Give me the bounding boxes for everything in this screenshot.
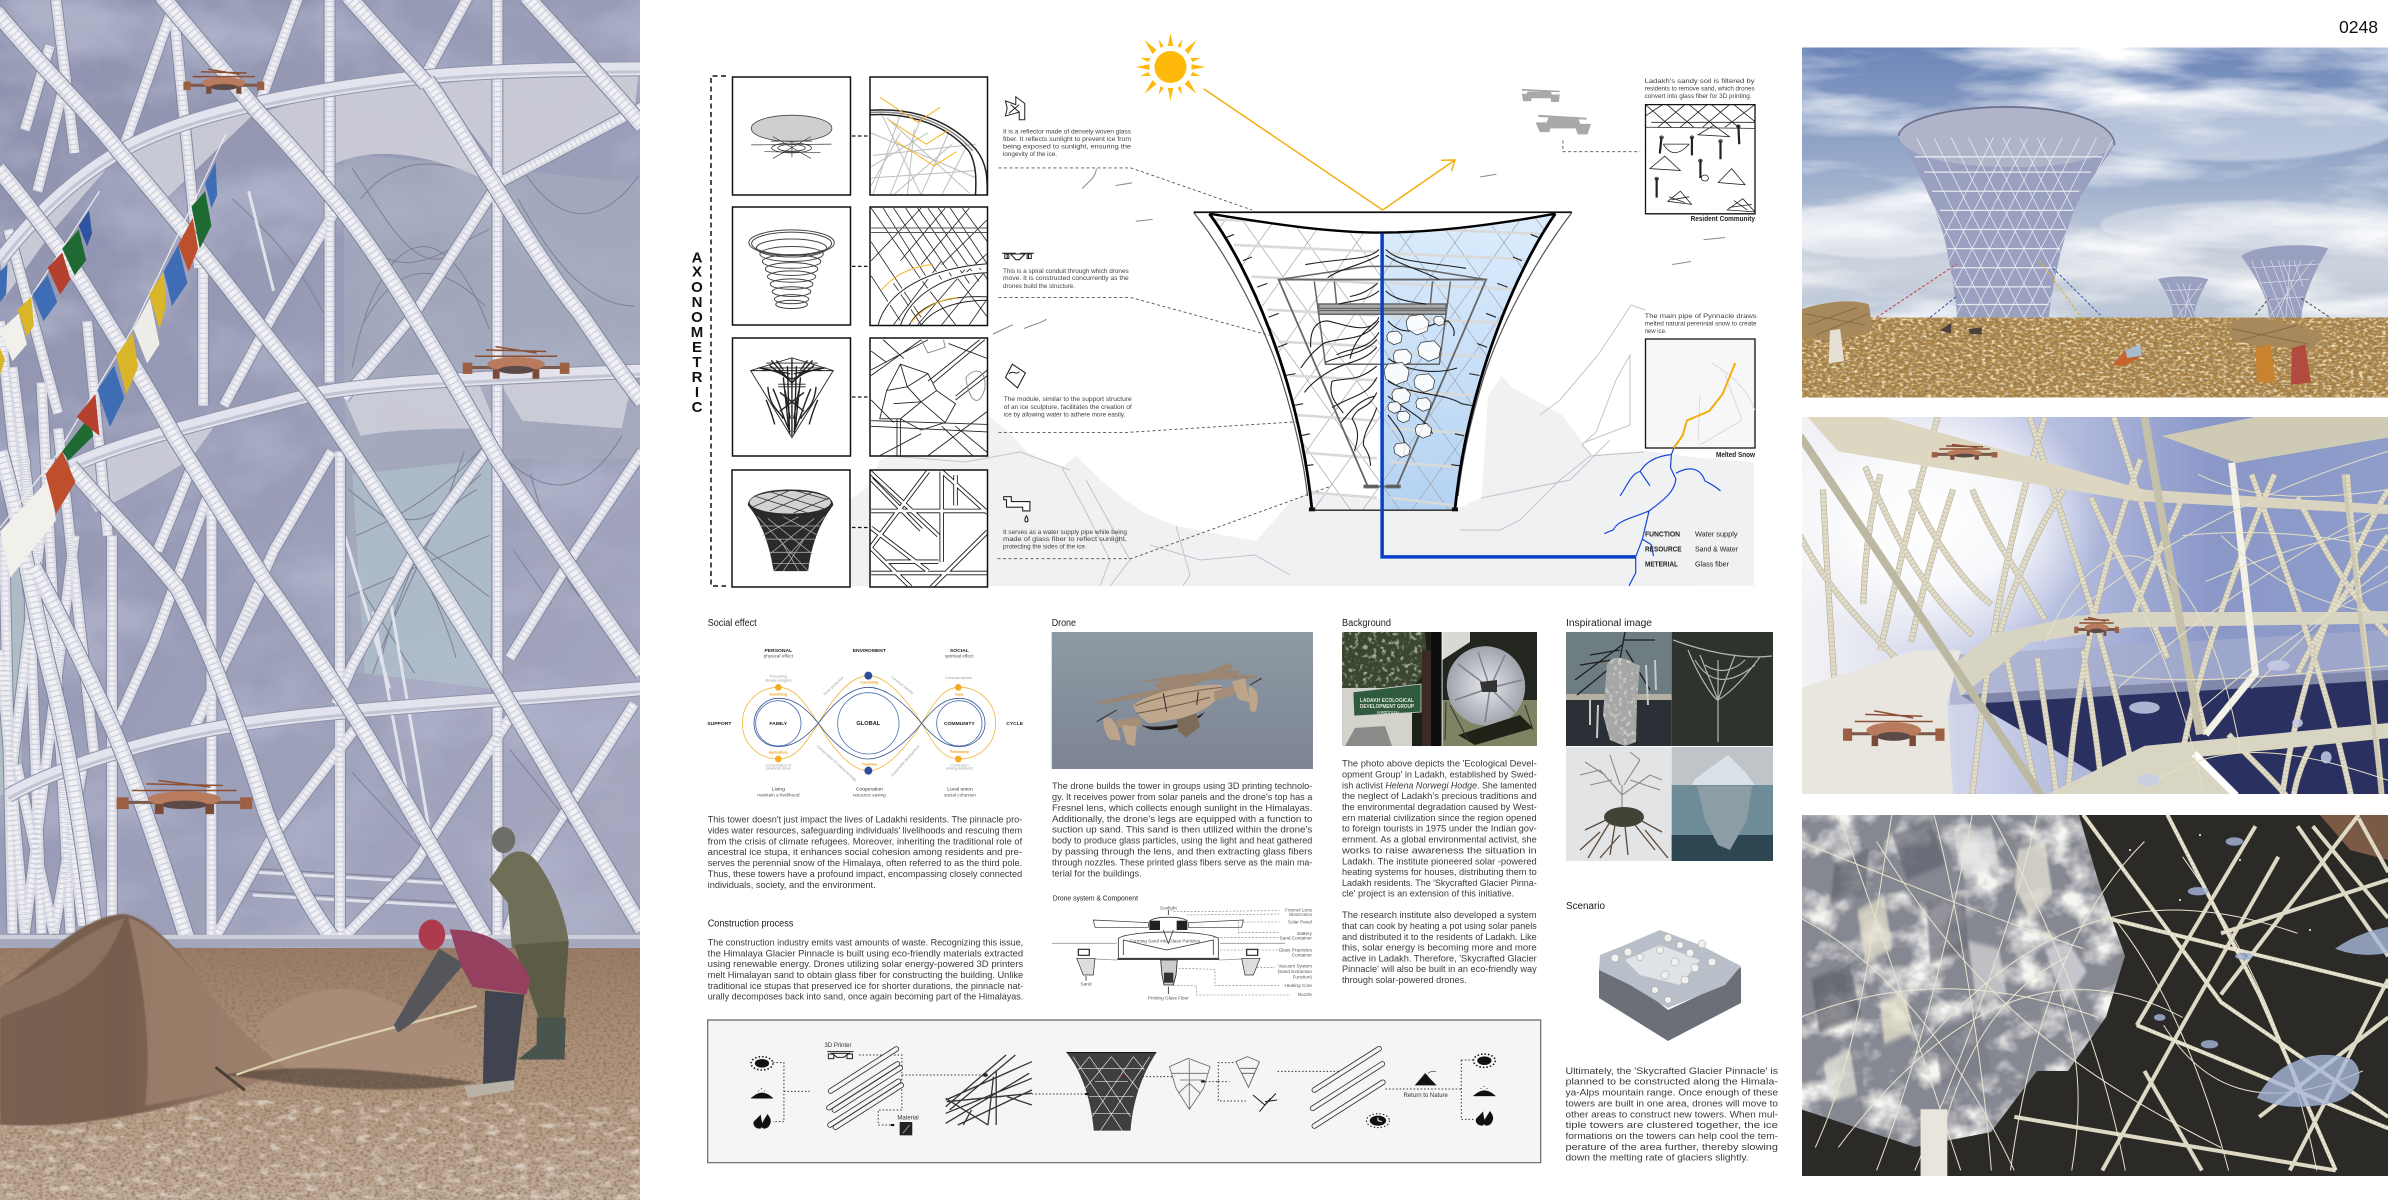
mountain backdrop of the main section (850, 305, 1754, 586)
text: drone paragraph: terial for the buildings. (1052, 868, 1142, 878)
text: reflector description: It is a reflector made of densely woven glass (1003, 128, 1132, 135)
text: spiral conduit description (1003, 268, 1129, 290)
photo: tree with roots (1566, 747, 1672, 861)
text: social effect paragraph: Thus, these towers have a profound impact, encompassing closely connected (708, 869, 1022, 879)
text: construction paragraph: traditional ice stupas that preserved ice for shorter durations, the pinnacle nat- (708, 981, 1023, 991)
text: social effect paragraph: from the crisis of climate refugees. Moreover, inheriting the traditional role of (708, 836, 1023, 846)
text: background paragraph 2: through solar-powered drones. (1342, 975, 1467, 985)
diagram labels: Connection (950, 764, 969, 768)
module parts (1236, 1057, 1277, 1112)
panel: left render, tower lattice with workers (0, 0, 642, 1200)
table: function resource material: Sand & Water (1695, 544, 1739, 554)
diagram labels: physical effect (764, 654, 794, 659)
axonometric bracket and vertical label (691, 76, 726, 586)
text: background paragraph 1: heating systems for houses, distributing them to (1342, 867, 1537, 877)
white floor and slab (1800, 417, 2388, 796)
diagram labels: Fellowship (950, 750, 970, 754)
text: scenario paragraph: perature of the area further, thereby slowing (1566, 1142, 1778, 1152)
labels in cycle diagram: 3D Printer (824, 1043, 852, 1049)
caption: melted snow: Melted Snow (1716, 450, 1755, 459)
central water pipe (1382, 234, 1636, 557)
diagram labels: Living (772, 787, 785, 793)
text: reflector description: longevity of the ice. (1003, 151, 1057, 158)
crystal facets (1811, 819, 2087, 1102)
text: background paragraph 1: Ladakh. The institute pioneered solar -powered (1342, 856, 1537, 866)
text: water pipe description: protecting the sides of the ice. (1003, 544, 1087, 550)
text: construction paragraph: the Himalaya Glacier Pinnacle is built using eco-friendly materials extracted (708, 948, 1023, 958)
text: spiral conduit description: drones build the structure. (1003, 283, 1075, 290)
river branches (1604, 449, 1720, 586)
text: drone paragraph: Fresnel lens, which collects enough sunlight in the Himalayas. (1052, 803, 1312, 813)
text: background paragraph 1: ern material civilization since the region opened (1342, 813, 1537, 823)
text: construction paragraph: melt Himalayan sand to obtain glass fiber for constructing the building. Unlike (708, 970, 1023, 980)
text: water pipe description: made of glass fiber to reflect sunlight, (1003, 536, 1127, 543)
panel: axonometric row 3 module (732, 338, 850, 456)
text: scenario paragraph: down the melting rate of glaciers slightly. (1566, 1153, 1748, 1163)
text: background paragraph 1: ernment. As a global environmental activist, she (1342, 835, 1537, 845)
photo: iced tree over sea (1566, 632, 1672, 746)
diagram: drone components: Electronics (1289, 912, 1313, 917)
small tower middle (2158, 276, 2208, 317)
diagram: drone components: Vacuum System (1278, 964, 1312, 969)
text: background paragraph 2: active in Ladakh. Therefore, 'Skycrafted Glacier (1342, 954, 1537, 964)
caption: drone system: Drone system & Component (1053, 893, 1138, 902)
table: function resource material: RESOURCE (1645, 544, 1682, 554)
tower vase (1066, 1052, 1156, 1131)
panel: axonometric row 2 spiral (732, 207, 850, 325)
heading: social effect: Social effect (708, 618, 757, 629)
diagram labels: resource saving (853, 793, 886, 798)
diagram labels: maintain a livelihood (757, 793, 800, 798)
diagram labels: CYCLE (1006, 721, 1024, 727)
diagram labels: perennial snow (766, 767, 791, 771)
icon: clock (1366, 1114, 1389, 1128)
text: background paragraph 1: the environmental degradation caused by West- (1342, 802, 1537, 812)
panel: axonometric row 3 detail (870, 338, 988, 456)
diagram labels: COMMUNITY (944, 721, 975, 727)
diagram: drone components: Fresnel Lens (1285, 907, 1313, 912)
heading: drone: Drone (1052, 618, 1076, 629)
diagram labels: Conservation of (766, 764, 792, 768)
diagram labels: PERSONAL (764, 648, 792, 654)
diagram labels: Sustainable development (890, 744, 920, 778)
diagram: drone components: Solar Panel (1288, 920, 1312, 925)
text: sand filtering note: Ladakh's sandy soil is filtered by (1645, 78, 1755, 85)
tower outline (1194, 212, 1572, 511)
chart: social effect infinity diagram (707, 648, 1024, 798)
text: scenario paragraph (1566, 1066, 1778, 1163)
text: scenario paragraph: ya-Alps mountain range. Once enough of these (1566, 1088, 1778, 1098)
diagram labels: Local union (947, 787, 973, 793)
diagram labels: ENVIROMENT (853, 648, 886, 654)
diagram labels: coexisting (860, 681, 878, 685)
photo: solar cooker dish (1434, 632, 1538, 746)
diagram labels: Preventing (770, 675, 787, 679)
text: water pipe description (1003, 529, 1127, 550)
text: drone paragraph (1052, 781, 1313, 878)
panel: axonometric row 1 detail (870, 77, 988, 195)
diagram: drone components (1052, 906, 1313, 1000)
icons: inputs sun sand water (751, 1057, 773, 1070)
text: scenario paragraph: tiple towers are clustered together, the ice (1566, 1120, 1778, 1130)
diagram labels: SOCIAL (950, 648, 969, 654)
panel: construction cycle diagram (708, 1020, 1541, 1163)
diagram labels: among residents (946, 767, 973, 771)
diagram labels: Agriculture (769, 751, 788, 755)
text: background paragraph 1: works to raise awareness the situation in (1341, 846, 1537, 856)
ice cluster (1800, 815, 2125, 1147)
grey drones (1522, 89, 1591, 134)
text: reflector description (1003, 128, 1132, 158)
diagram labels: Common wishes (945, 676, 972, 680)
text: background paragraph 1: opment Group' in Ladakh, established by Swed- (1342, 769, 1537, 779)
diagram: drone components: Nozzle (1298, 992, 1312, 997)
diagram labels: Common identity (890, 675, 914, 695)
text: background paragraph 2: The research institute also developed a system (1342, 910, 1537, 920)
dark sky (1802, 815, 2388, 1176)
diagram: drone components: Sand Container (1280, 935, 1312, 940)
photo: dew on spider web (1672, 632, 1773, 746)
text: sand filtering note: residents to remove sand, which drones (1645, 86, 1755, 93)
text: main pipe note (1645, 313, 1757, 335)
sky with clouds (1770, 48, 2400, 320)
standing worker (489, 827, 569, 1060)
table: function resource material: METERIAL (1645, 560, 1678, 568)
text: scenario paragraph: towers are built in one area, drones will move to (1566, 1098, 1778, 1108)
diagram labels: Tradition (862, 762, 877, 766)
text: module description: of an ice sculpture, facilitates the creation of (1004, 404, 1132, 411)
text: background paragraph 2: Pinnacle' will also be built in an eco-friendly way (1342, 964, 1537, 974)
ground (0, 935, 640, 1200)
yellow outer loop (742, 676, 996, 771)
diagram labels: Snow protection (823, 676, 845, 696)
diagram labels (707, 648, 1024, 798)
arrow: reflected sunlight (1204, 89, 1455, 210)
text: social effect paragraph: This tower doesn't just impact the lives of Ladakhi residents. The pinnacle pro- (708, 814, 1022, 824)
labels in cycle diagram (824, 1043, 1449, 1122)
text: sand filtering note (1645, 78, 1755, 100)
illustration: scenario terrain block (1599, 930, 1741, 1041)
text: module description: ice by allowing water to adhere more easily. (1004, 412, 1125, 418)
icon: mountain return (1415, 1071, 1437, 1085)
golden ground (1802, 318, 2388, 398)
icon: reflector (1005, 97, 1025, 120)
melted snow line (1674, 364, 1735, 448)
text: drone paragraph: by passing through the lens, and then extracting glass fibers (1052, 846, 1313, 856)
diagram: drone components: Heating Core (1285, 983, 1312, 988)
photo: iceberg (1672, 747, 1773, 861)
photo: drone render (1052, 632, 1313, 769)
text: drone paragraph: suction up sand. This sand is then utilized within the drone's (1052, 825, 1313, 835)
text: construction paragraph (708, 938, 1024, 1002)
ice droplets (2129, 660, 2332, 786)
icon: water pipe (1004, 497, 1030, 522)
text: scenario paragraph: Ultimately, the 'Skycrafted Glacier Pinnacle' is (1566, 1066, 1778, 1076)
sand mounds (0, 914, 481, 1126)
photo: ecological development group sign: KARZOO LEH (1377, 710, 1399, 715)
icon: material (891, 1122, 912, 1135)
diagram labels: climate refugees (765, 678, 792, 682)
small tower right (2241, 245, 2328, 317)
large tower (1898, 106, 2116, 318)
text: background paragraph 2 (1342, 910, 1537, 985)
lattice fragment (946, 1055, 1032, 1125)
panel: render 1, towers on golden plain (1770, 48, 2400, 398)
thin cables (1800, 815, 2363, 1170)
text: background paragraph 1: Ladakh residents. The 'Skycrafted Glacier Pinna- (1342, 878, 1537, 888)
glass fiber tubes (829, 1049, 901, 1127)
panel: axonometric row 1 reflector (732, 77, 850, 195)
labels in cycle diagram: Return to Nature (1404, 1093, 1449, 1099)
text: background paragraph 1: The photo above depicts the 'Ecological Devel- (1342, 758, 1537, 768)
diagram labels: benefiting (770, 693, 787, 697)
white ropes lattice (2014, 815, 2388, 1170)
photo: ecological development group sign (1342, 632, 1442, 746)
diagram labels: spiritual effect (945, 654, 974, 659)
diagram: drone components: Forming Sand into Glass Particles (1130, 939, 1201, 944)
main tower section drawing (1193, 88, 1721, 586)
text: scenario paragraph: planned to be constructed along the Himala- (1566, 1077, 1778, 1087)
icon: drone (1002, 253, 1034, 260)
text: sand filtering note: convert into glass fiber for 3D printing. (1645, 93, 1752, 100)
bending worker with rake (216, 920, 531, 1098)
text: background paragraph 1: to foreign tourists in 1975 under the Indian gov- (1342, 824, 1537, 834)
diagram: drone components: Function) (1293, 974, 1312, 979)
text: reflector description: being exposed to sunlight, ensuring the (1003, 143, 1131, 150)
text: background paragraph 2: that can cook by heating a pot using solar panels (1342, 921, 1537, 931)
text: scenario paragraph: formations on the towers can help cool the tem- (1566, 1131, 1778, 1141)
lattice ropes background (1800, 417, 2388, 796)
diagram: drone components: Sunlight (1160, 906, 1177, 911)
text: spiral conduit description: move. It is constructed concurrently as the (1003, 275, 1129, 282)
text: social effect paragraph: serves the perennial snow of the Himalaya, often referred to as the third pole. (708, 858, 1022, 868)
tower fill halves (1214, 216, 1552, 510)
panel: render 3, ice formations at night (1800, 815, 2388, 1178)
thin cables (2045, 451, 2388, 788)
circles and nodes (756, 693, 982, 754)
table: function resource material: FUNCTION (1645, 530, 1680, 538)
diagram: drone components: Printing Glass Fiber (1148, 995, 1189, 1000)
labels in cycle diagram: Material (897, 1116, 919, 1122)
heading: construction process: Construction process (708, 918, 793, 930)
text: background paragraph 2: this, solar energy is becoming more and more (1342, 942, 1537, 952)
tower structure (0, 0, 642, 937)
caption: resident community: Resident Community (1691, 214, 1756, 223)
heading: inspirational image: Inspirational image (1566, 618, 1652, 629)
drones (1843, 444, 2119, 746)
diagram labels: FAMILY (769, 721, 788, 727)
text: social effect paragraph: vides water resources, safeguarding individuals' livelihoods and rescuing them (708, 825, 1023, 835)
drones (117, 69, 569, 814)
text: social effect paragraph: ancestral ice stupa, it enhances social cohesion among residents and pre- (708, 847, 1022, 857)
text: drone paragraph: through nozzles. These printed glass fibers serve as the main ma- (1052, 857, 1312, 867)
project number: 0248 (2339, 17, 2378, 37)
icon: 3D printer drone (827, 1052, 854, 1059)
text: module description (1004, 396, 1132, 418)
diagram: drone components: (Sand Extraction (1278, 969, 1312, 974)
text: reflector description: fiber. It reflects sunlight to prevent ice from (1003, 136, 1131, 143)
prayer flag strings (1877, 260, 2330, 320)
icons: outputs sun sand water (1473, 1054, 1495, 1067)
connector dashes between axonometric boxes (852, 136, 869, 528)
panel: render 2, interior walkway with drones (1802, 417, 2388, 794)
diagram labels: Conservation of cultural heritage (816, 744, 858, 782)
diagram: drone components: Battery (1297, 931, 1313, 936)
panel: melted snow map (1646, 339, 1755, 448)
text: construction paragraph: urally decomposes back into sand, once again becoming part of the Himalayas. (708, 992, 1023, 1002)
photo: ecological development group sign: LADAKH ECOLOGICAL (1360, 698, 1414, 704)
dotted process links (773, 1055, 1473, 1125)
sky and glass pane backdrop (0, 0, 640, 960)
panel: axonometric row 4 detail (869, 470, 988, 587)
leader lines to tower (998, 168, 1330, 559)
diagram: drone components: Container (1292, 952, 1312, 957)
text: background paragraph 2: and distributed it to the residents of Ladakh. Like (1342, 932, 1537, 942)
diagram: drone components: Glass Practicles (1279, 947, 1313, 952)
text: water pipe description: It serves as a water supply pipe while being (1003, 529, 1127, 536)
root-like cables (1301, 249, 1466, 466)
diagram labels: hope (955, 692, 964, 696)
text: drone paragraph: Additionally, the drone's legs are equipped with a function to (1052, 814, 1312, 824)
text: main pipe note: melted natural perennial snow to create (1645, 320, 1757, 327)
ice droplets (2154, 838, 2388, 1106)
sky (1802, 417, 2388, 794)
exploded frame (1170, 1058, 1210, 1109)
return tubes (1313, 1049, 1383, 1126)
structural frames (1800, 417, 2382, 796)
heading: background: Background (1342, 618, 1391, 629)
pipe base (1921, 1109, 1947, 1178)
icon: ice module (1005, 364, 1025, 388)
table: function resource material (1645, 530, 1739, 568)
table: function resource material: Glass fiber (1695, 560, 1730, 568)
icon: sun (1136, 33, 1206, 101)
blue inner loop (754, 687, 985, 759)
diagram labels: GLOBAL (856, 721, 881, 727)
text: drone paragraph: body to produce glass particles, using the light and heat gathered (1052, 836, 1312, 846)
text: social effect paragraph (708, 814, 1023, 890)
heading: scenario: Scenario (1566, 901, 1605, 912)
text: module description: The module, similar to the support structure (1004, 396, 1132, 403)
ice rocks (1384, 314, 1445, 457)
label: AXONOMETRIC: AXONOMETRIC (691, 249, 703, 416)
text: drone paragraph: gy. It receives power from solar panels and the drone's top has a (1052, 792, 1313, 802)
inner frame (1279, 266, 1486, 488)
diagram: drone components: Sand (1081, 981, 1092, 986)
prayer flags (0, 134, 226, 578)
diagram labels: social cohesion (944, 793, 976, 798)
text: construction paragraph: The construction industry emits vast amounts of waste. Recognizing this issue, (708, 938, 1023, 948)
birds (993, 169, 1725, 334)
text: main pipe note: new ice. (1645, 328, 1667, 335)
text: spiral conduit description: This is a spiral conduit through which drones (1003, 268, 1129, 275)
panel: axonometric row 2 detail (870, 207, 988, 326)
text: background paragraph 1: the neglect of Ladakh's precious traditions and (1342, 791, 1537, 801)
text: drone paragraph: The drone builds the tower in groups using 3D printing technolo- (1052, 781, 1312, 791)
diagram labels: SUPPORT (707, 721, 731, 727)
text: scenario paragraph: other areas to construct new towers. When mul- (1566, 1109, 1778, 1119)
text: main pipe note: The main pipe of Pynnacle draws (1645, 313, 1757, 320)
text: background paragraph 1 (1341, 758, 1537, 898)
photo: ecological development group sign: DEVELOPMENT GROUP (1360, 704, 1415, 710)
text: background paragraph 1: cle' project is an extension of this initiative. (1342, 888, 1514, 898)
text: background paragraph 1: ish activist Helena Norwegi Hodge. She lamented (1342, 780, 1537, 790)
text: construction paragraph: using renewable energy. Drones utilizing solar energy-powered 3D printers (708, 959, 1024, 969)
table: function resource material: Water supply (1695, 530, 1738, 538)
people carrying bundles (1800, 301, 2324, 385)
panel: resident community sketch (1646, 105, 1755, 214)
diagram labels: Cooperation (856, 787, 883, 793)
text: social effect paragraph: individuals, society, and the environment. (708, 880, 876, 890)
panel: axonometric row 4 vase (732, 470, 850, 587)
